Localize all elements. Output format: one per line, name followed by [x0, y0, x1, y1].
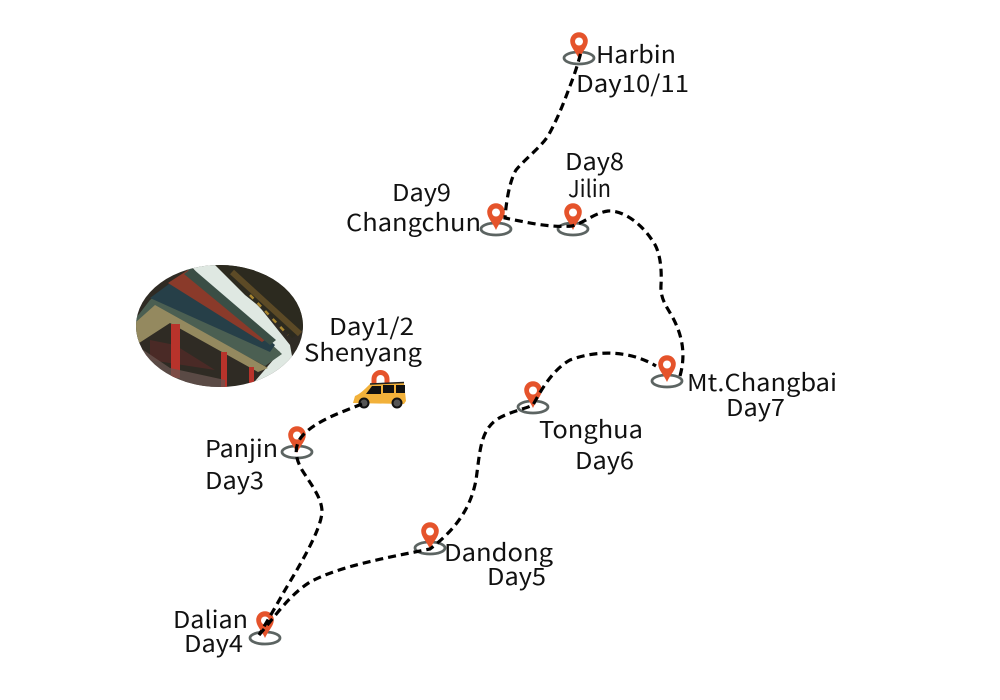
- location: Harbin: [564, 32, 689, 99]
- location: Dandong: Day5: [487, 558, 546, 592]
- location: Jilin: Day8: [565, 143, 624, 177]
- location: Shenyang: Shenyang: [304, 334, 422, 368]
- location: Dalian: [173, 601, 280, 659]
- location: Tonghua: Day6: [575, 442, 634, 476]
- location: Dandong: Dandong: [444, 534, 553, 568]
- location: Changchun: Changchun: [346, 204, 481, 238]
- location: Shenyang: Day1/2: [329, 308, 414, 342]
- photo: palace roof in oval: [136, 265, 303, 387]
- location: Tonghua: Tonghua: [539, 411, 643, 445]
- location: Mt.Changbai: [652, 355, 837, 423]
- location: Dandong: [415, 522, 553, 592]
- location: Shenyang: [304, 308, 422, 408]
- dashed route: Shenyang to Harbin: [259, 52, 683, 635]
- location: Mt.Changbai: Day7: [726, 389, 785, 423]
- location: Jilin: [558, 143, 624, 235]
- location: Changchun: [346, 174, 511, 238]
- location: Panjin: Panjin: [205, 430, 278, 464]
- location: Harbin: Harbin: [596, 36, 676, 70]
- location: Dalian: Dalian: [173, 601, 248, 635]
- location: Dalian: Day4: [184, 625, 243, 659]
- location: Jilin: Jilin: [568, 170, 611, 204]
- location: Panjin: [205, 426, 312, 496]
- location: Panjin: Day3: [205, 462, 264, 496]
- location: Mt.Changbai: Mt.Changbai: [687, 364, 837, 398]
- location: Harbin: Day10/11: [576, 65, 689, 99]
- location: Tonghua: [518, 381, 643, 476]
- location: Changchun: Day9: [392, 174, 451, 208]
- icon: yellow van: [353, 382, 406, 408]
